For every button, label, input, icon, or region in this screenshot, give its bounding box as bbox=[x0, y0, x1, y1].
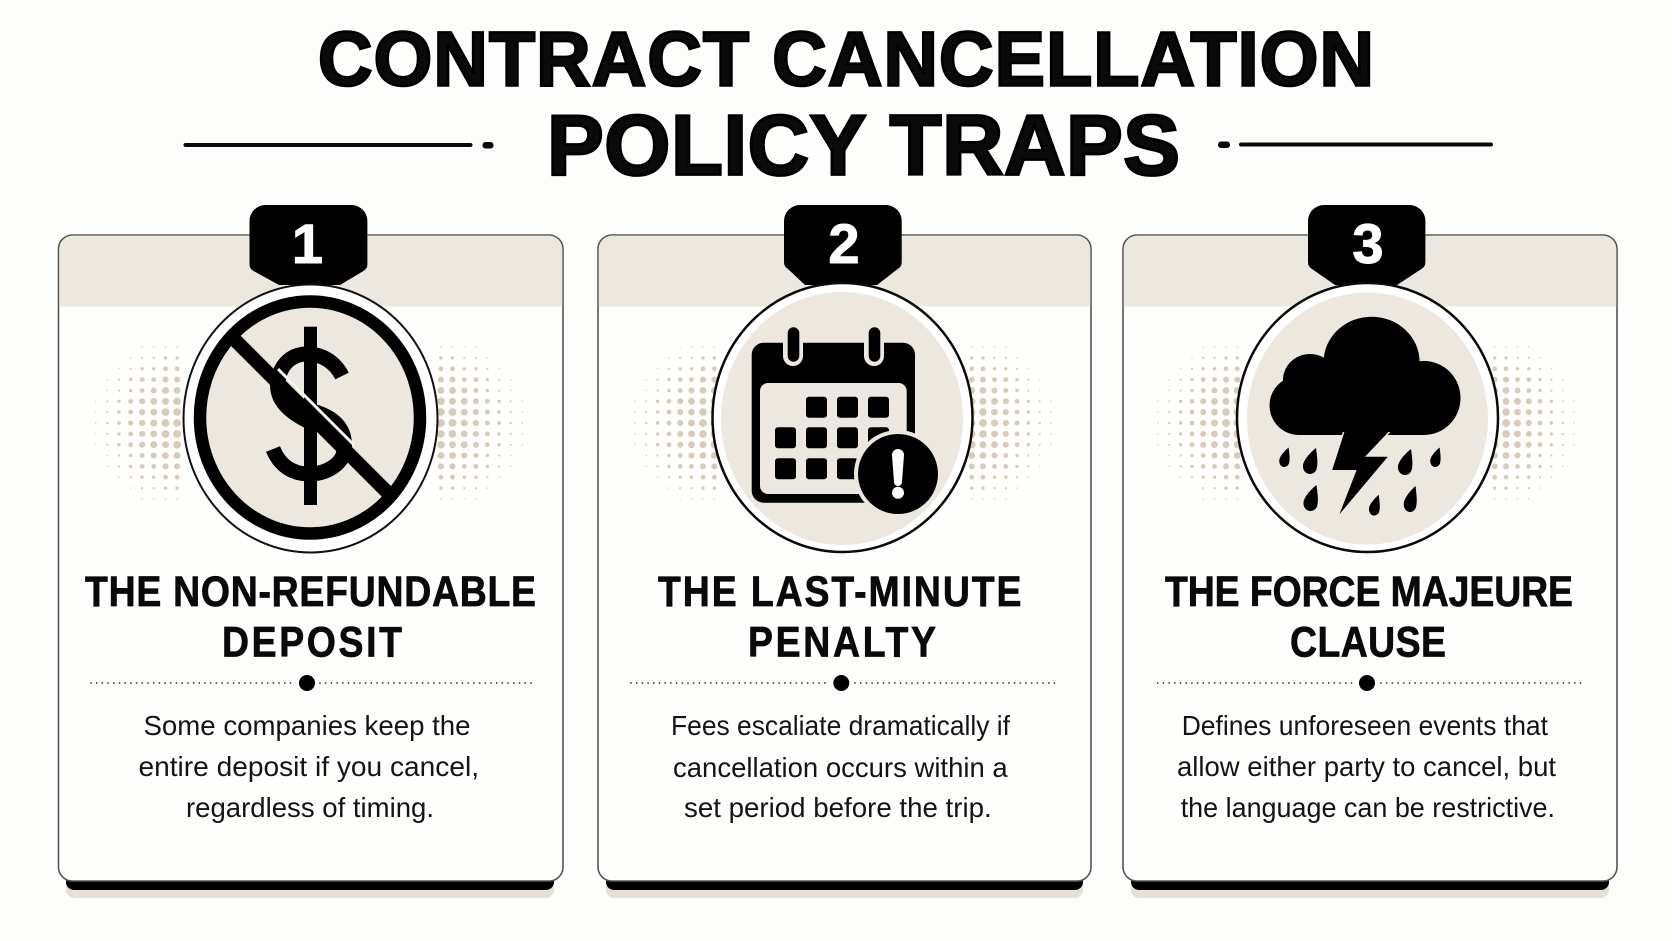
card body text: Defines unforeseen events that bbox=[1182, 710, 1548, 741]
halftone dots bbox=[635, 347, 1051, 499]
card heading: PENALTY bbox=[748, 618, 936, 666]
card body text: entire deposit if you cancel, bbox=[138, 751, 479, 782]
card body text bbox=[671, 710, 1010, 823]
card body text bbox=[1177, 710, 1556, 823]
card body text: regardless of timing. bbox=[186, 792, 434, 823]
title rule left bbox=[184, 142, 494, 148]
card heading: THE LAST-MINUTE bbox=[658, 567, 1021, 615]
card heading: CLAUSE bbox=[1290, 618, 1446, 666]
title line 2: POLICY TRAPS bbox=[547, 98, 1180, 194]
card base shadow and bar bbox=[1131, 870, 1609, 898]
number badge 3: 3 bbox=[1352, 212, 1384, 275]
title line 1: CONTRACT CANCELLATION bbox=[318, 17, 1374, 103]
card base shadow and bar bbox=[66, 870, 554, 898]
card heading: THE NON-REFUNDABLE bbox=[85, 567, 536, 615]
card header band bbox=[599, 236, 1090, 306]
card body text: the language can be restrictive. bbox=[1181, 792, 1555, 823]
title bbox=[318, 17, 1374, 194]
halftone dots bbox=[96, 347, 522, 499]
number badge 1: 1 bbox=[292, 212, 323, 275]
divider with dot bbox=[631, 675, 1055, 691]
card header band bbox=[1124, 236, 1616, 306]
card heading bbox=[658, 567, 1021, 666]
card heading: DEPOSIT bbox=[222, 618, 402, 666]
card header band bbox=[59, 236, 562, 306]
card body text: Fees escaliate dramatically if bbox=[671, 710, 1010, 741]
card body text: allow either party to cancel, but bbox=[1177, 751, 1556, 782]
card heading bbox=[1165, 567, 1573, 666]
card body bbox=[58, 235, 563, 881]
icon: no money bbox=[184, 284, 438, 552]
card base shadow and bar bbox=[606, 870, 1083, 898]
card body text: cancellation occurs within a bbox=[673, 752, 1008, 783]
card body bbox=[1123, 235, 1617, 881]
number badge 3 bbox=[1308, 205, 1425, 285]
number badge 1 bbox=[249, 205, 367, 285]
number badge 2 bbox=[784, 205, 902, 285]
divider with dot bbox=[1158, 675, 1583, 691]
card body text: set period before the trip. bbox=[684, 792, 992, 823]
card body text bbox=[138, 710, 479, 823]
card heading bbox=[85, 567, 536, 666]
panel: the last-minute penalty bbox=[598, 205, 1091, 898]
divider with dot bbox=[91, 675, 531, 691]
title rule right bbox=[1218, 142, 1493, 148]
halftone dots bbox=[1158, 347, 1574, 499]
card body bbox=[598, 235, 1091, 881]
icon: calendar with alert bbox=[712, 283, 972, 552]
icon: storm cloud bbox=[1237, 283, 1498, 552]
number badge 2: 2 bbox=[828, 212, 860, 275]
card heading: THE FORCE MAJEURE bbox=[1165, 567, 1573, 615]
panel: the non-refundable deposit bbox=[58, 205, 563, 898]
panel: the force majeure clause bbox=[1123, 205, 1617, 898]
card body text: Some companies keep the bbox=[144, 710, 470, 741]
